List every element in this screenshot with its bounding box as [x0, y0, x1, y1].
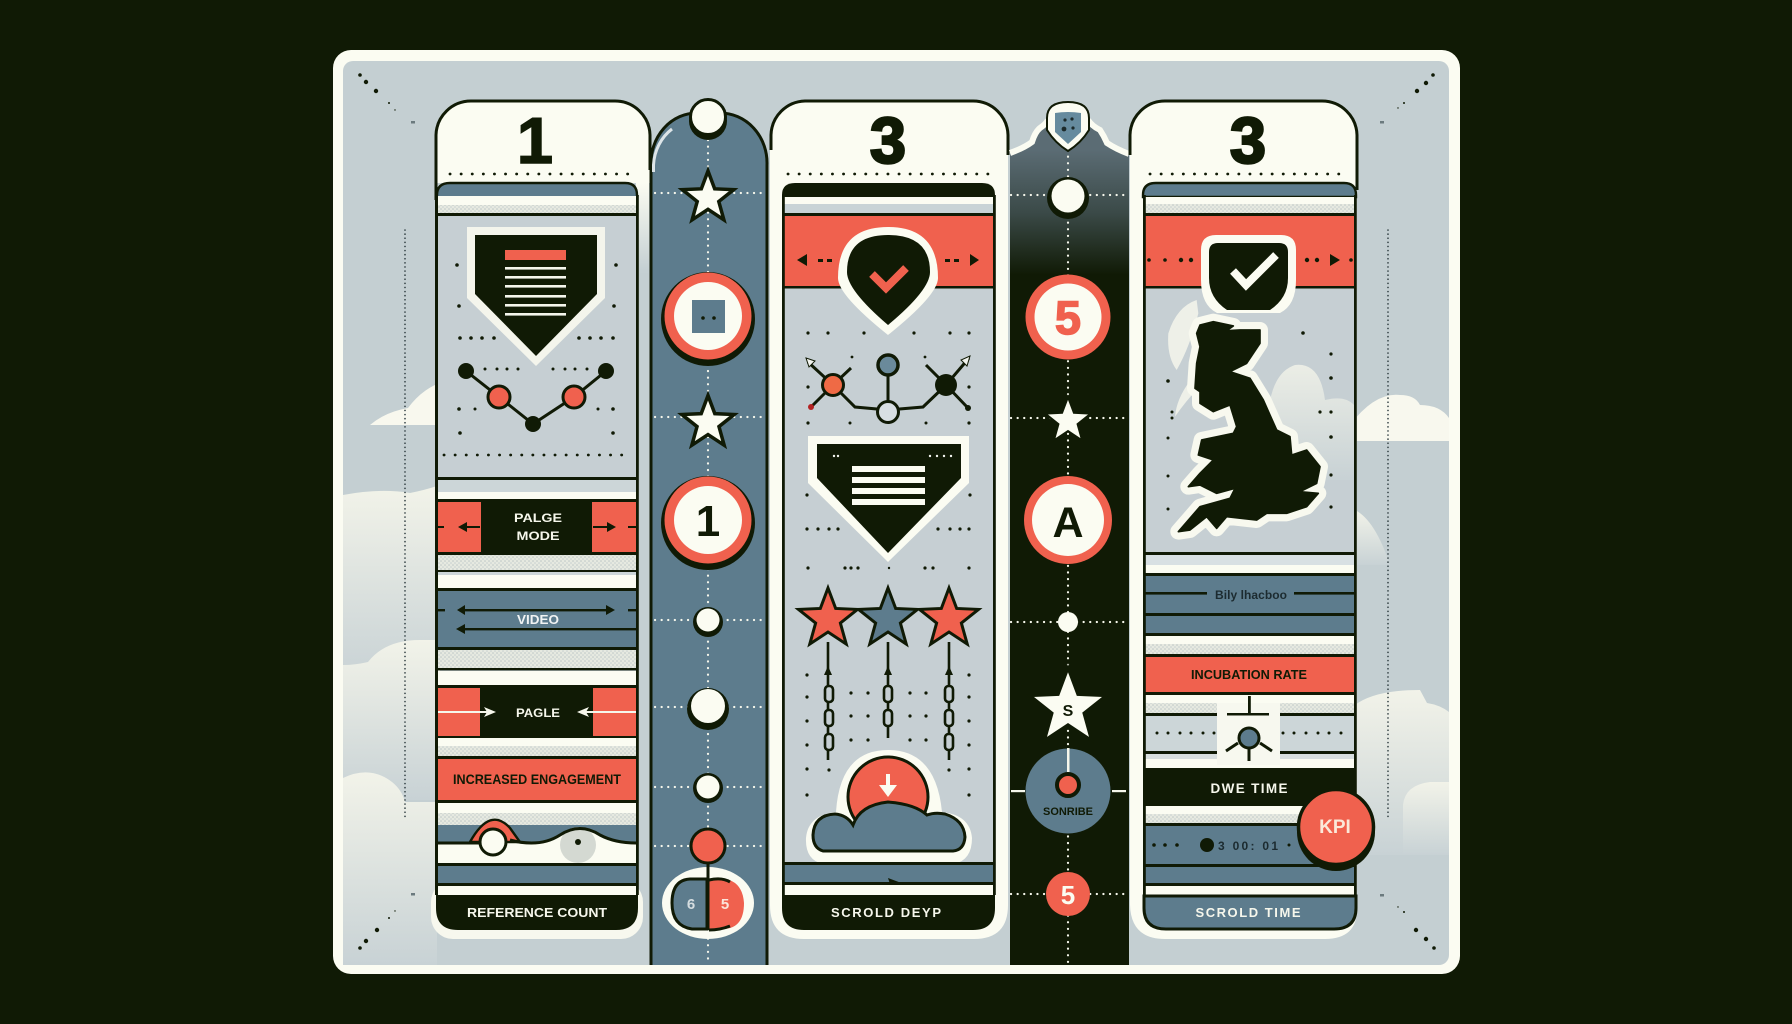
- network chart: [458, 363, 614, 432]
- icon: check shield: [1201, 235, 1296, 313]
- card 2 gray body: [783, 214, 995, 864]
- panel: timeline strip 1: [651, 100, 767, 965]
- dotted side rule: right: [1387, 230, 1389, 818]
- corner dots: top right: [1380, 73, 1435, 124]
- card 1 footer: reference count: REFERENCE COUNT: [467, 905, 607, 920]
- node: coral circle: [691, 829, 725, 863]
- node: top circle: [1047, 177, 1089, 219]
- card 3 stacked rows: [1143, 552, 1356, 895]
- panel: timeline strip 2: [1010, 102, 1129, 965]
- band: video: VIDEO: [517, 612, 559, 627]
- node: coral 5: 5: [1061, 880, 1075, 910]
- map dot markers: [1166, 331, 1333, 510]
- background panel: [343, 61, 1449, 965]
- split oval badge: 6: [687, 896, 695, 913]
- dot row: [805, 331, 972, 531]
- card 2 top strip: [782, 183, 995, 197]
- card 3 inner cloud: [1268, 365, 1354, 480]
- icon: document shield: [467, 227, 605, 366]
- corner dots: bottom left: [358, 893, 415, 950]
- clouds: right: [1350, 395, 1449, 855]
- dot rows beside node: [1156, 732, 1342, 734]
- node: letter A badge: A: [1052, 499, 1084, 547]
- card 1 body: [437, 214, 637, 478]
- dot grid: [455, 263, 618, 435]
- clouds: left: [343, 380, 450, 965]
- band: timer: [1145, 826, 1354, 864]
- band: teal label: [1145, 576, 1356, 613]
- corner dots: bottom right: [1380, 894, 1436, 950]
- strip 2 dotted lines: [1011, 150, 1128, 965]
- band: video: [438, 591, 636, 647]
- KPI badge: KPI: [1319, 817, 1351, 838]
- card 3 footer: scroll time: [1144, 896, 1356, 929]
- band: timer: 3 00: 01: [1218, 839, 1278, 853]
- teal disc with label: SONRIBE: [1043, 806, 1093, 818]
- panel: card 1: [431, 101, 650, 939]
- network diagram: [806, 355, 971, 422]
- node: number 1 badge: [661, 476, 755, 570]
- wave timeline: [438, 820, 636, 863]
- strip 1 background: [651, 113, 767, 965]
- icon: large star with S: S: [1063, 703, 1074, 720]
- band: page mode: [438, 502, 636, 552]
- number 1: 1: [517, 104, 553, 177]
- node: small circle: [693, 773, 723, 803]
- node: small circle: [693, 607, 723, 637]
- card 2 footer: scrold deyp: SCROLD DEYP: [831, 905, 941, 920]
- node: number 1 badge: 1: [696, 497, 720, 546]
- node: number 5 badge: 5: [1055, 291, 1081, 344]
- number 3: 3: [870, 104, 906, 177]
- dot grid lower: [805, 566, 971, 797]
- UK map silhouette: [1168, 300, 1320, 532]
- icon: star: [1045, 397, 1091, 440]
- card 1 top strip: [437, 183, 637, 200]
- number 3: 3: [1230, 104, 1266, 177]
- card 2 body background: [770, 101, 1008, 939]
- coral band with arrows: [783, 216, 995, 288]
- icon: cloud with download arrow: [806, 750, 972, 864]
- strip 2 background: [1010, 103, 1129, 965]
- band: increased engagement: INCREASED ENGAGEMENT: [453, 771, 621, 787]
- card 3 footer: scroll time: SCROLD TIME: [1196, 905, 1301, 920]
- icon: large star with S: [1030, 668, 1106, 740]
- card 2 lower strip: [782, 862, 995, 895]
- outer frame: [333, 50, 1460, 974]
- node: letter A badge: [1024, 476, 1112, 564]
- band: incubation rate: [1145, 657, 1354, 692]
- band: dwell time: DWE TIME: [1210, 781, 1288, 796]
- node: coral 5: [1046, 872, 1090, 916]
- card 3 background: [1130, 101, 1357, 939]
- icon: check pin: [838, 227, 938, 335]
- node: medium circle: [687, 688, 729, 730]
- icon: star: [682, 171, 734, 220]
- teal disc with label: [1011, 748, 1126, 834]
- panel: card 2: [770, 101, 1008, 939]
- chain arrows: [824, 642, 953, 760]
- node: number 5 badge: [1026, 274, 1110, 360]
- band: increased engagement: [438, 759, 636, 800]
- card 1 stacked rows: [437, 477, 637, 896]
- band: page: [438, 688, 636, 736]
- three stars: [799, 588, 978, 644]
- card 1 right margin fade: [636, 183, 649, 273]
- node: top circle: [689, 100, 727, 140]
- panel: card 3: [1130, 101, 1375, 939]
- node icon in white tile: [1217, 696, 1280, 765]
- band: page mode: PALGE: [514, 511, 562, 525]
- band: page mode: MODE: [516, 529, 560, 543]
- dotted side rule: left: [404, 230, 406, 818]
- card 3 top strip: [1143, 183, 1356, 213]
- band: teal label: Bily lhacboo: [1215, 588, 1287, 602]
- band: dwell time: [1145, 768, 1356, 806]
- corner dots: top left: [358, 73, 415, 124]
- card 3 coral band: [1143, 213, 1356, 288]
- card 2 footer: scrold deyp: [782, 895, 995, 930]
- card 1 footer: reference count: [436, 895, 638, 930]
- band: incubation rate: INCUBATION RATE: [1191, 668, 1307, 682]
- strip 1 dotted lines: [655, 140, 765, 965]
- card 1 header: [436, 101, 650, 183]
- KPI badge: [1297, 790, 1375, 871]
- icon: star: [682, 396, 734, 445]
- band: page: PAGLE: [516, 706, 560, 720]
- card 1 bottom halo: [431, 880, 643, 939]
- icon: top shield: [1047, 102, 1089, 151]
- split oval badge: 5: [721, 896, 729, 913]
- card 3 gray body: [1144, 214, 1356, 554]
- node: square badge: [661, 272, 755, 366]
- icon: document shield: [808, 436, 969, 562]
- node: small dot: [1058, 612, 1078, 632]
- split oval badge: [662, 863, 754, 939]
